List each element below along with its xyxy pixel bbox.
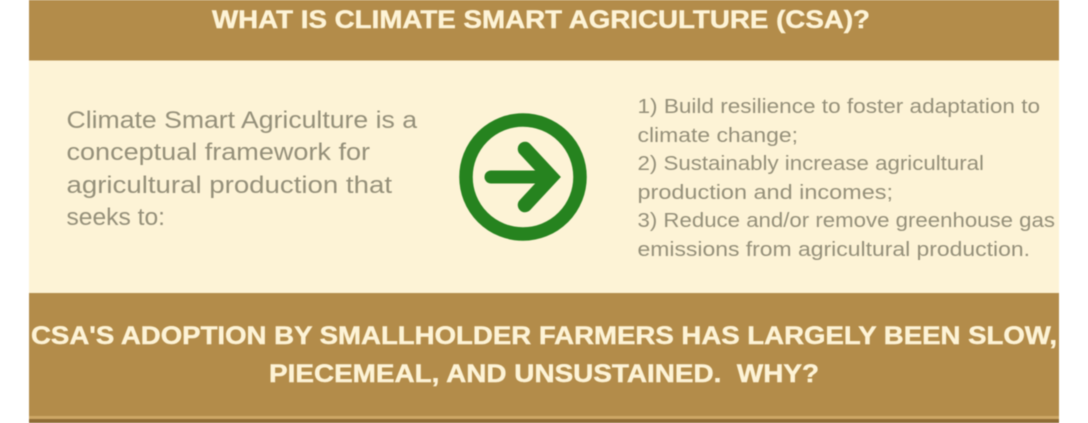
panel: adoption question band: [29, 293, 1059, 423]
text block: definition intro: Climate Smart Agriculture is a: [66, 107, 418, 134]
text block: three objectives: [638, 96, 1055, 261]
text block: three objectives: 1) Build resilience to foster adaptation to: [638, 96, 1040, 118]
icon: green arrow in circle: [466, 120, 580, 234]
heading: adoption question: [31, 322, 1057, 388]
heading: adoption question: CSA'S ADOPTION BY SMALLHOLDER FARMERS HAS LARGELY BEEN SLOW,: [31, 322, 1057, 350]
text block: three objectives: production and incomes;: [638, 182, 893, 204]
panel: definition: [29, 60, 1059, 293]
text block: definition intro: seeks to:: [66, 204, 165, 231]
text block: three objectives: climate change;: [638, 125, 798, 147]
heading: adoption question: PIECEMEAL, AND UNSUSTAINED. WHY?: [269, 360, 819, 388]
text block: definition intro: agricultural production that: [66, 172, 392, 199]
text block: three objectives: 3) Reduce and/or remove greenhouse gas: [638, 210, 1055, 232]
text block: three objectives: emissions from agricultural production.: [638, 239, 1030, 261]
panel: top heading band: [29, 0, 1059, 60]
text block: definition intro: conceptual framework for: [66, 139, 370, 166]
title: WHAT IS CLIMATE SMART AGRICULTURE (CSA)?: [212, 6, 870, 34]
text block: three objectives: 2) Sustainably increase agricultural: [638, 153, 984, 175]
text block: definition intro: [66, 107, 418, 231]
